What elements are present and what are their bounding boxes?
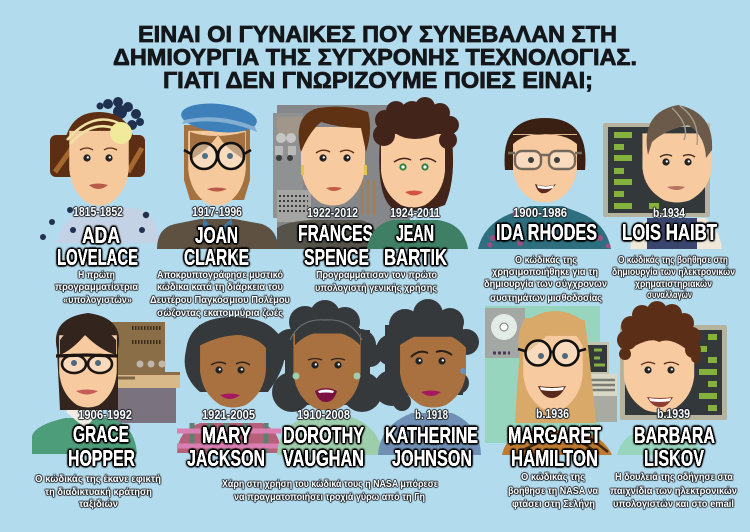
dates: 1906-1992 (78, 407, 132, 422)
dates: b.1939 (657, 406, 690, 421)
name: IDA RHODES (496, 219, 597, 245)
name: VAUGHAN (283, 445, 364, 471)
icon: tape computer (485, 306, 617, 443)
dates: 1917-1996 (192, 204, 242, 219)
description: χρησιμοποιήθηκε για τη (492, 267, 598, 278)
description: Ο κώδικάς της βοήθησε στη (618, 255, 728, 266)
description: Ο κώδικάς της έκανε εφικτή (35, 474, 161, 485)
name: GRACE (73, 421, 129, 447)
icon: control console (110, 322, 180, 423)
dates: b.1936 (536, 406, 569, 421)
description: υπολογιστών και στο email (613, 499, 734, 510)
description: Mary, Dorothy and Katherine (222, 479, 438, 503)
dates: 1921-2005 (202, 407, 255, 422)
description: «υπολογιστών» (63, 295, 132, 306)
panel: Joan Clarke (150, 100, 290, 319)
portrait: Lois Haibt (630, 105, 722, 249)
name: DOROTHY (283, 422, 364, 448)
portrait: Frances Spence (277, 107, 385, 249)
title: ΓΙΑΤΙ ΔΕΝ ΓΝΩΡΙΖΟΥΜΕ ΠΟΙΕΣ ΕΙΝΑΙ; (163, 67, 593, 93)
panel: Jean Bartik (367, 97, 468, 270)
description: κώδικα κατά τη διάρκεια του (157, 282, 283, 293)
description (508, 472, 599, 510)
name: HAMILTON (511, 445, 598, 471)
dates: b. 1918 (415, 407, 448, 422)
name: LOVELACE (57, 244, 138, 270)
icon: computer machine (273, 105, 410, 245)
portrait: Margaret Hamilton (502, 311, 612, 455)
title: ΔΗΜΙΟΥΡΓΙΑ ΤΗΣ ΣΥΓΧΡΟΝΗΣ ΤΕΧΝΟΛΟΓΙΑΣ. (113, 44, 637, 70)
description: Frances and Jean: Προγραμμάτισαν τον πρώτο (316, 270, 437, 281)
description: παιχνίδια των ηλεκτρονικών (610, 486, 737, 497)
name (385, 422, 478, 471)
name (298, 220, 373, 270)
name (283, 422, 364, 471)
description: συστημάτων μισθοδοσίας (490, 293, 602, 304)
description (484, 255, 607, 304)
name: MARY (202, 422, 251, 448)
dates: 1900-1986 (513, 205, 567, 220)
name: KATHERINE (385, 422, 478, 448)
description (55, 270, 139, 306)
name (57, 222, 138, 270)
panel: Barbara Liskov (610, 301, 737, 510)
name (634, 422, 715, 471)
panel: Margaret Hamilton (485, 306, 617, 510)
description: προγραμματίστρια (55, 282, 139, 293)
name: JOHNSON (392, 445, 472, 471)
description (610, 472, 737, 510)
name: JEAN (396, 220, 434, 246)
name: MARGARET (508, 422, 601, 448)
portrait: Katherine Johnson (374, 299, 481, 455)
description: Δευτέρου Παγκόσμιου Πολέμου (150, 295, 290, 306)
description: Η πρώτη (78, 270, 115, 281)
description (35, 474, 161, 510)
dates: 1815-1852 (73, 204, 123, 219)
dates: 1924-2011 (390, 205, 440, 220)
description: Ο κώδικάς της (521, 472, 585, 483)
description: δημιουργία των σύγχρονων (484, 279, 607, 290)
portrait: Dorothy Vaughan (272, 300, 383, 455)
description (150, 270, 290, 319)
icon: monitor (603, 123, 710, 217)
description: Αποκρυπτογράφησε μυστικό (157, 270, 283, 281)
description: συναλλαγών (647, 290, 692, 301)
name: CLARKE (184, 244, 249, 270)
icon: monitor (620, 325, 727, 420)
name: SPENCE (304, 244, 369, 270)
description: Ο κώδικάς της (515, 255, 577, 266)
panel: Frances Spence (273, 105, 410, 270)
panel: Ida Rhodes (478, 118, 611, 304)
name (68, 421, 135, 471)
panel: Dorothy Vaughan (272, 300, 383, 471)
description: χρηματιστηριακών (635, 279, 712, 290)
description: Frances and Jean (315, 270, 437, 294)
name (508, 422, 601, 471)
name: HOPPER (68, 445, 135, 471)
description: Mary, Dorothy and Katherine: να πραγματοποιήσει τροχιά γύρω από τη Γη (234, 492, 425, 503)
portrait: Joan Clarke (157, 100, 278, 249)
name: LOIS HAIBT (622, 219, 717, 245)
description: βοήθησε τη NASA να (508, 486, 599, 497)
name: BARBARA (634, 422, 715, 448)
portrait: Grace Hopper (32, 313, 137, 454)
name: BARTIK (384, 244, 447, 270)
portrait: Jean Bartik (367, 97, 468, 249)
title: ΕΙΝΑΙ ΟΙ ΓΥΝΑΙΚΕΣ ΠΟΥ ΣΥΝΕΒΑΛΑΝ ΣΤΗ (138, 21, 617, 47)
description: σώζοντας εκατομμύρια ζωές (157, 308, 283, 319)
description: ταξιδιών (79, 499, 118, 510)
panel: Grace Hopper (32, 313, 180, 510)
name (384, 220, 447, 270)
name (184, 222, 249, 270)
panel: Mary Jackson (177, 317, 285, 471)
description: Mary, Dorothy and Katherine: Χάρη στη χρήση του κώδικά τους η NASA μπόρεσε (222, 479, 438, 490)
description (612, 255, 735, 301)
name (187, 422, 265, 471)
dates: 1922-2012 (307, 205, 358, 220)
description: Frances and Jean: υπολογιστή γενικής χρήσης (315, 283, 437, 294)
name: LISKOV (644, 445, 704, 471)
portrait: Ada Lovelace (40, 97, 158, 243)
portrait: Ida Rhodes (478, 118, 611, 249)
title (113, 21, 637, 93)
description: τη διαδικτυακή κράτηση (45, 487, 152, 498)
name: JOAN (195, 222, 238, 248)
description: φτάσει στη Σελήνη (512, 499, 595, 510)
portrait: Mary Jackson (177, 317, 285, 453)
description: Η δουλειά της οδήγησε στα (615, 472, 734, 483)
panel: Lois Haibt (603, 105, 735, 301)
panel: Ada Lovelace (40, 97, 158, 306)
dates: 1910-2008 (297, 407, 350, 422)
name: JACKSON (187, 445, 265, 471)
name: ADA (82, 222, 120, 248)
panel: Katherine Johnson (374, 299, 481, 471)
portrait: Barbara Liskov (617, 301, 702, 455)
dates: b.1934 (653, 205, 686, 220)
name: FRANCES (298, 220, 373, 246)
